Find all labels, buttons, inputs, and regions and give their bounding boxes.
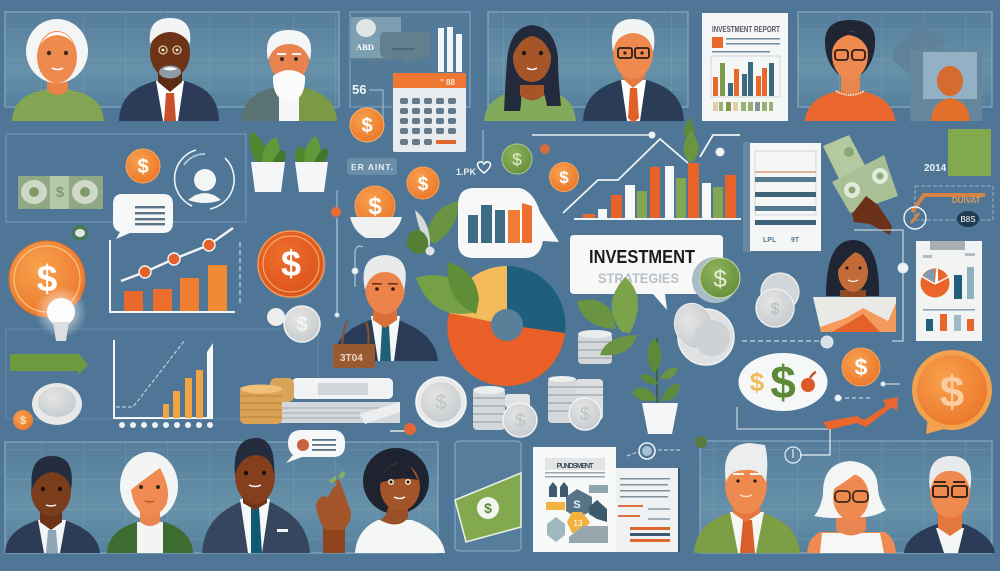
icon: large orange coin left: $ xyxy=(37,258,58,299)
document: form sheet: LPL xyxy=(763,237,777,244)
icon: big orange coin with tail xyxy=(912,350,992,434)
icon: lightbulb xyxy=(35,286,87,341)
donut pie chart xyxy=(447,266,566,386)
speech bubble: small icon and lines xyxy=(286,430,345,463)
document: form sheet: 9T xyxy=(791,237,800,244)
bubble: dollar signs with apple: $ xyxy=(750,367,765,397)
icon: silver stack two xyxy=(548,376,603,430)
document: investment report: INVESTMENT REPORT xyxy=(712,25,780,34)
callout: investment strategies xyxy=(570,235,723,310)
icon: silver stack with coin: $ xyxy=(515,411,526,432)
person: white hair woman green jacket xyxy=(107,452,193,553)
icon: orange red coin: $ xyxy=(281,243,301,284)
icon: orange coin right of green: $ xyxy=(559,168,569,187)
callout: investment strategies: STRATEGIES xyxy=(598,270,679,286)
icon: orange coin beside calendar xyxy=(350,108,384,142)
icon: green coin on callout xyxy=(692,257,740,303)
icon: dollar bill xyxy=(18,176,103,209)
person: woman long dark hair xyxy=(484,25,576,121)
panel: top left portraits xyxy=(5,12,339,107)
icon: green banknote: $ xyxy=(484,500,492,516)
icon: orange coin top xyxy=(126,149,160,183)
icon: white plant pot left xyxy=(249,131,286,192)
label: percent with heart: 1.PK xyxy=(456,167,477,177)
person: tall man navy suit teal tie xyxy=(202,438,310,553)
icon: arrow with label: DUIVAT xyxy=(952,196,981,205)
icon: silver stack two: $ xyxy=(580,404,590,424)
document: investment report xyxy=(702,13,788,121)
icon: arrow with label: B8S xyxy=(960,215,976,224)
callout: investment strategies: INVESTMENT xyxy=(589,247,695,267)
arrow: orange zigzag xyxy=(823,397,898,430)
icon: orange dot xyxy=(331,207,341,217)
label: small tag: ER AINT. xyxy=(351,162,393,172)
number label 56 xyxy=(352,82,383,122)
icon: calendar xyxy=(393,73,466,152)
icon: orange coin centre: $ xyxy=(418,174,429,195)
panel: bottom right portraits xyxy=(700,441,992,553)
person: woman at laptop xyxy=(813,240,896,332)
person: central man with suit xyxy=(333,255,438,361)
document: report with hexagons xyxy=(533,447,680,552)
icon: grey speech bubbles with label xyxy=(350,17,430,66)
icon: gold coin stack xyxy=(240,378,294,424)
icon: grey speech bubbles with label: ABD xyxy=(356,42,374,52)
icon: rolled papers xyxy=(280,378,400,424)
person: older woman green top xyxy=(12,19,104,121)
icon: pointing hand xyxy=(316,472,351,553)
person: man green jacket orange tie xyxy=(694,443,800,553)
speech bubble: mini bar chart xyxy=(458,188,559,258)
icon: small green token xyxy=(72,225,88,241)
icon: coin in bowl: $ xyxy=(368,193,382,220)
person: woman afro white top xyxy=(355,448,445,553)
document: clipboard charts xyxy=(916,241,982,341)
icon: leaf sprig centre xyxy=(406,201,458,256)
icon: orange coin right of green xyxy=(550,162,578,192)
connector lines: central left xyxy=(335,190,363,317)
icon: orange red coin xyxy=(258,231,326,299)
icon: leaves and silver stack xyxy=(577,277,638,364)
icon: user profile circle xyxy=(175,150,234,209)
photo card with silhouette xyxy=(910,50,982,121)
label: percent with heart xyxy=(456,130,490,177)
icon: small orange coin xyxy=(13,410,33,430)
connector lines around woman xyxy=(737,230,908,429)
person: dark-skinned man white hair and suit xyxy=(119,18,219,121)
icon: orange coin right xyxy=(842,348,880,386)
icon: silver stack with coin xyxy=(473,386,537,437)
number label 56: 56 xyxy=(352,82,366,97)
icon: green coin on callout: $ xyxy=(713,266,727,293)
icon: silver coins pair: $ xyxy=(296,314,308,336)
icon: orange pin dot xyxy=(390,423,416,435)
green square xyxy=(948,129,991,176)
panel: top calendar xyxy=(350,12,470,107)
person: woman dark bob glasses orange top xyxy=(805,20,895,121)
bubble: dollar signs with apple xyxy=(738,353,828,411)
label: small tag xyxy=(347,158,397,175)
person: man glasses orange tie xyxy=(583,19,684,123)
document: report with hexagons: S xyxy=(573,499,581,511)
person: man glasses navy jacket xyxy=(904,456,995,553)
icon: briefcase tag: 3T04 xyxy=(340,353,363,364)
icon: arrow with label xyxy=(904,186,993,229)
bubble: dollar signs with apple: $ xyxy=(770,356,796,408)
icon: silver coins right of callout xyxy=(756,273,799,327)
person: man dark hair suit xyxy=(5,456,100,553)
document: report with hexagons: PUNDSMENT xyxy=(556,461,594,470)
panel: top right portraits xyxy=(798,12,992,107)
panel: top middle portraits xyxy=(488,12,688,107)
panel: lower left outline xyxy=(6,329,318,419)
line and bar chart: growth xyxy=(532,118,741,220)
icon: orange coin right: $ xyxy=(855,354,868,380)
icon: speech bubble lines xyxy=(113,194,173,239)
person: white hair woman glasses xyxy=(807,461,896,553)
bar and line chart xyxy=(110,228,240,312)
panel: middle left outline xyxy=(6,134,246,222)
icon: white plant pot right xyxy=(295,136,328,192)
icon: orange coin beside calendar: $ xyxy=(361,115,373,137)
icon: ring target with dashes xyxy=(627,443,682,459)
icon: banknotes in hand xyxy=(823,135,898,235)
arrow: green xyxy=(10,353,88,375)
icon: silver coins pair xyxy=(267,306,320,342)
connector lines with ring xyxy=(785,429,830,463)
icon: green coin xyxy=(502,144,532,174)
icon: coin in bowl xyxy=(350,186,402,238)
panel: bottom banknote xyxy=(455,441,521,551)
person: bearded man grey and green jacket xyxy=(241,30,337,121)
icon: leaves over donut xyxy=(416,262,479,314)
document: form sheet xyxy=(743,142,821,252)
growth bar chart xyxy=(114,340,213,428)
icon: orange coin top: $ xyxy=(137,156,149,178)
icon: silver coin lower left xyxy=(32,383,82,425)
icon: silver coins right of callout: $ xyxy=(771,301,780,318)
icon: orange coin centre xyxy=(407,167,439,199)
icon: green coin: $ xyxy=(512,150,522,169)
icon: green dot xyxy=(695,436,707,448)
icon: dollar bill: $ xyxy=(56,184,65,201)
panel: bottom left portraits xyxy=(5,442,438,553)
label: 2014: 2014 xyxy=(924,163,947,174)
icon: grey building shape xyxy=(893,24,946,85)
document: report with hexagons: 13 xyxy=(574,519,583,528)
icon: big orange coin with tail: $ xyxy=(940,368,964,417)
icon: silver coins pile xyxy=(668,298,734,365)
icon: green banknote xyxy=(455,473,521,542)
icon: calendar: " 88 xyxy=(440,78,455,87)
icon: large silver coin: $ xyxy=(435,392,447,414)
icon: small orange coin: $ xyxy=(20,415,26,427)
icon: large orange coin left xyxy=(9,241,85,317)
icon: briefcase tag xyxy=(333,322,375,368)
icon: white bars behind calendar xyxy=(438,27,462,72)
icon: large silver coin xyxy=(416,377,466,427)
icon: potted plant xyxy=(632,338,680,434)
